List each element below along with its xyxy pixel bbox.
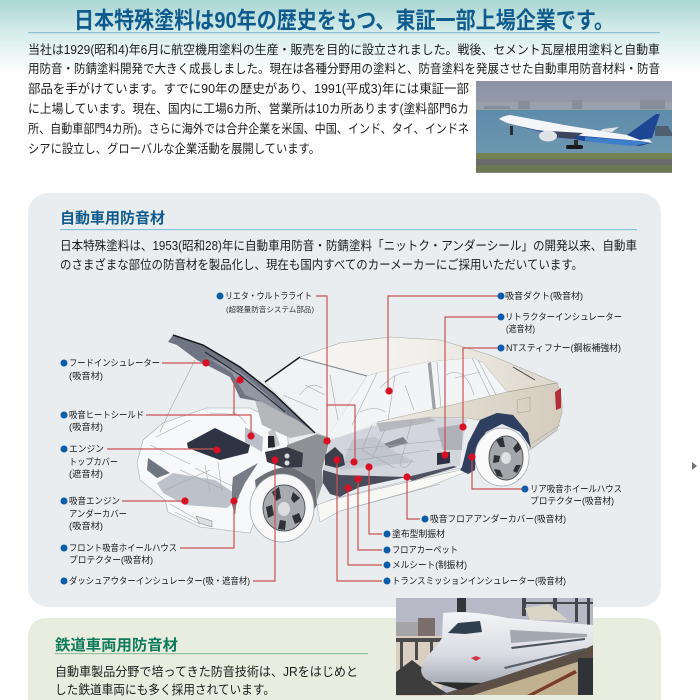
- intro text block: 部品を手がけています。すでに90年の歴史があり、1991(平成3)年には東証一部: [28, 82, 469, 96]
- firewall and bracket: [265, 434, 345, 500]
- red location markers: [181, 359, 476, 505]
- intro text block: に上場しています。現在、国内に工場6カ所、営業所は10カ所あります(塗料部門6カ: [28, 101, 469, 116]
- label: front wheel house protector: プロテクター(吸音材): [69, 554, 153, 565]
- photo: shinkansen train: [396, 598, 593, 696]
- greenhouse and roof: [265, 337, 557, 437]
- heading: railway: 鉄道車両用防音材: [55, 636, 178, 654]
- label: engine top cover: エンジン: [69, 444, 104, 454]
- label: heat shield: 吸音ヒートシールド: [69, 409, 144, 420]
- label: engine top cover: [60, 444, 118, 479]
- automotive description text: 日本特殊塗料は、1953(昭和28)年に自動車用防音・防錆塗料「ニットク・アンダーシール」の開発以来、自動車: [60, 238, 637, 253]
- label: retractor insulator: [498, 312, 622, 334]
- sill and body underside: [317, 468, 466, 522]
- label: Retia Ultralight: [216, 291, 314, 314]
- label: sound absorbing duct: 吸音ダクト(吸音材): [505, 290, 583, 301]
- leader lines: [107, 296, 522, 581]
- open hood: [160, 335, 315, 438]
- title: 日本特殊塗料は90年の歴史をもつ、東証一部上場企業です。: [74, 7, 614, 33]
- automotive description text: のさまざまな部位の防音材を製品化し、現在も国内すべてのカーメーカーにご採用いただいています。: [60, 257, 583, 272]
- intro text block: [28, 42, 660, 156]
- label: hood insulator: (吸音材): [69, 370, 103, 381]
- intro text block: シアに設立し、グローバルな企業活動を展開しています。: [28, 141, 320, 156]
- label: Retia Ultralight: リエタ・ウルトラライト: [225, 291, 312, 301]
- panel: automotive soundproofing: [28, 193, 661, 607]
- intro text block: 所、自動車部門4カ所)。さらに海外では合弁企業を米国、中国、インド、タイ、インドネ: [28, 121, 469, 136]
- label: NT stiffener: NTスティフナー(鋼板補強材): [506, 342, 621, 353]
- tracks and platform: [440, 645, 593, 695]
- label: mel sheet: メルシート(制振材): [392, 559, 467, 570]
- rear wheel arch and wheel: [460, 413, 531, 486]
- icon: next arrow: [692, 462, 697, 470]
- label: rear wheel house protector: リア吸音ホイールハウス: [530, 483, 622, 494]
- label: hood insulator: [60, 358, 160, 381]
- automotive description text: [60, 238, 637, 272]
- label: front wheel house protector: [60, 542, 177, 565]
- label: coated damping material: 塗布型制振材: [392, 528, 445, 539]
- label: transmission insulator: トランスミッションインシュレーター(吸音材): [392, 575, 566, 586]
- label: front wheel house protector: フロント吸音ホイールハウス: [69, 542, 177, 553]
- front body and bumper: [137, 408, 290, 533]
- plane fuselage: [499, 115, 652, 146]
- label: Retia Ultralight: (超軽量防音システム部品): [226, 304, 314, 314]
- label: engine top cover: (遮音材): [69, 468, 103, 479]
- panel: railway soundproofing: [28, 618, 661, 700]
- label: retractor insulator: (遮音材): [506, 323, 535, 334]
- label: heat shield: [60, 409, 144, 432]
- label: rear wheel house protector: プロテクター(吸音材): [530, 495, 614, 506]
- front wheel: [250, 468, 317, 542]
- label: engine under cover: (吸音材): [69, 520, 103, 531]
- railway description text: [55, 664, 358, 697]
- beige rear body: [377, 383, 562, 450]
- label: retractor insulator: リトラクターインシュレーター: [505, 312, 622, 322]
- label: engine under cover: アンダーカバー: [69, 508, 127, 519]
- car cutaway illustration: [137, 335, 562, 542]
- heading: automotive: 自動車用防音材: [60, 209, 165, 227]
- side windows: [328, 358, 507, 437]
- label: engine under cover: 吸音エンジン: [69, 495, 120, 506]
- front wheel arch protector: [232, 463, 258, 515]
- photo: ANA airplane taking off: [476, 81, 672, 173]
- label: floor under cover: 吸音フロアアンダーカバー(吸音材): [430, 513, 566, 524]
- label: engine top cover: トップカバー: [69, 457, 118, 467]
- label: dash outer insulator: ダッシュアウターインシュレーター(吸・遮音材): [69, 575, 250, 586]
- label: rear wheel house protector: [522, 483, 622, 506]
- intro text block: 用防音・防錆塗料開発で大きく成長しました。現在は各種分野用の塗料と、防音塗料を発展させた自動車用防音材料・防音: [28, 61, 660, 76]
- interior floor: [323, 417, 467, 497]
- label: heat shield: (吸音材): [69, 421, 103, 432]
- label: hood insulator: フードインシュレーター: [69, 358, 160, 368]
- intro text block: 当社は1929(昭和4)年6月に航空機用塗料の生産・販売を目的に設立されました。戦後、セメント瓦屋根用塗料と自動車: [28, 42, 660, 57]
- railway description text: した鉄道車両にも多く採用されています。: [55, 683, 275, 697]
- train body: [421, 612, 593, 683]
- engine top cover: [187, 428, 250, 460]
- label: engine under cover: [60, 495, 127, 531]
- label: floor carpet: フロアカーペット: [392, 545, 458, 555]
- railway description text: 自動車製品分野で培ってきた防音技術は、JRをはじめと: [55, 664, 358, 679]
